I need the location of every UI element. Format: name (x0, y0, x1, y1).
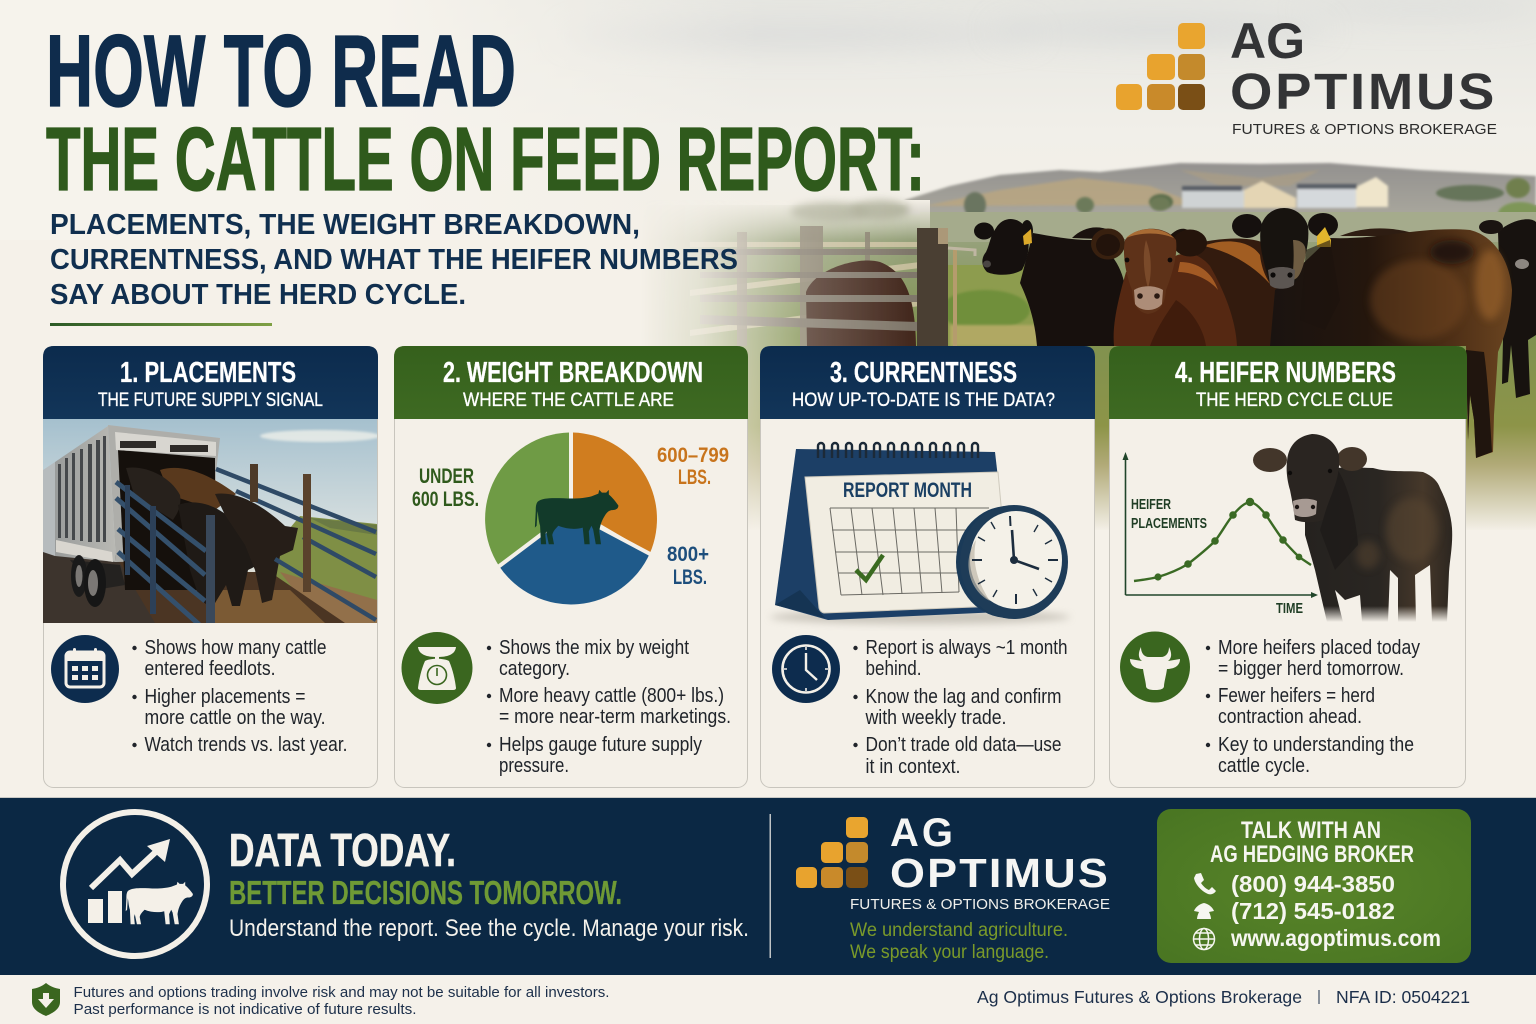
illustration: dark cow left (974, 219, 1124, 346)
icon: shield (32, 983, 60, 1016)
callout: contact box (1157, 809, 1471, 963)
illustration: rear cow body (1190, 238, 1288, 346)
text: currentness bullets: Know the lag and confirm (866, 686, 1062, 708)
text: placements bullets: Higher placements = (144, 686, 306, 708)
icon: calendar (51, 635, 119, 703)
icon: scale (402, 632, 472, 704)
text: risk disclaimer: Futures and options trading involve risk and may not be suitable for all investors. (74, 985, 610, 1001)
illustration: black heifer (1253, 434, 1452, 622)
chart labels: weight categories: 800+ (667, 543, 709, 566)
slogan: Understand the report. See the cycle. Manage your risk. (229, 915, 749, 942)
text: weight bullets: Shows the mix by weight (499, 637, 689, 659)
text: NFA identification (977, 987, 1470, 1007)
callout: contact box: www.agoptimus.com (1230, 925, 1441, 951)
panel: 3. currentness (760, 346, 1095, 788)
line chart: heifer placements over time: HEIFER (1131, 497, 1171, 513)
subtitle: CURRENTNESS, AND WHAT THE HEIFER NUMBERS (50, 244, 738, 276)
text: risk disclaimer: Past performance is not indicative of future results. (74, 1002, 416, 1018)
text: placements bullets (132, 637, 348, 756)
icon: phone (1194, 873, 1216, 894)
chart labels: weight categories: LBS. (678, 466, 711, 489)
text: placements bullets: more cattle on the way. (144, 707, 326, 729)
line chart: heifer placements over time: TIME (1276, 601, 1303, 617)
icon: growth chart with cow (63, 812, 207, 956)
heading: heifer numbers: 4. HEIFER NUMBERS (1175, 357, 1396, 389)
title: HOW TO READ (46, 14, 516, 128)
panel: 1. placements (43, 346, 380, 788)
text: currentness bullets: it in context. (866, 756, 960, 778)
text: heifer bullets: = bigger herd tomorrow. (1218, 658, 1404, 680)
logo: Ag Optimus footer: OPTIMUS (890, 850, 1110, 896)
footer banner (0, 797, 1536, 975)
subtitle: PLACEMENTS, THE WEIGHT BREAKDOWN, (50, 209, 640, 241)
text: weight bullets: More heavy cattle (800+ lbs.) (499, 685, 724, 707)
text: NFA identification: NFA ID: 0504221 (1336, 987, 1470, 1007)
disclaimer strip (0, 975, 1536, 1024)
logo: Ag Optimus footer: AG (890, 811, 953, 855)
heading: heifer numbers (1175, 357, 1396, 411)
chart labels: weight categories: 600 LBS. (412, 488, 479, 511)
callout: contact box: TALK WITH AN (1241, 817, 1381, 844)
illustration: background cattle backs (1072, 227, 1422, 250)
text: currentness bullets: Report is always ~1 month (866, 637, 1068, 659)
heading: heifer numbers: THE HERD CYCLE CLUE (1196, 389, 1393, 411)
icon: cow silhouette (535, 490, 618, 544)
text: weight bullets (487, 637, 731, 777)
subtitle: SAY ABOUT THE HERD CYCLE. (50, 279, 466, 311)
panel: 2. weight breakdown (394, 346, 748, 788)
heading: weight breakdown: WHERE THE CATTLE ARE (463, 389, 674, 411)
logo: Ag Optimus top: FUTURES & OPTIONS BROKERAGE (1232, 121, 1497, 138)
heading: weight breakdown: 2. WEIGHT BREAKDOWN (443, 357, 703, 389)
heading: currentness: 3. CURRENTNESS (830, 357, 1017, 389)
slogan (229, 824, 749, 942)
icon: globe (1194, 928, 1214, 950)
subtitle (50, 209, 738, 311)
logo: Ag Optimus footer: We speak your language. (850, 942, 1049, 963)
text: currentness bullets: behind. (866, 658, 922, 680)
heading: currentness: HOW UP-TO-DATE IS THE DATA? (792, 389, 1055, 411)
title: THE CATTLE ON FEED REPORT: (46, 110, 925, 210)
photo: cattle loading onto truck (43, 419, 380, 628)
line chart: heifer placements over time: PLACEMENTS (1131, 516, 1207, 532)
icon: landline phone (1194, 903, 1214, 919)
illustration: brown cow center (1091, 228, 1237, 346)
text: placements bullets: entered feedlots. (144, 658, 276, 680)
slogan: DATA TODAY. (229, 824, 456, 876)
panel: 4. heifer numbers (1109, 346, 1467, 788)
text: currentness bullets (853, 637, 1068, 778)
text: NFA identification: Ag Optimus Futures & Options Brokerage (977, 987, 1302, 1007)
chart labels: weight categories: LBS. (673, 566, 707, 589)
callout: contact box: (712) 545-0182 (1231, 898, 1395, 924)
heading: currentness (792, 357, 1055, 411)
logo: Ag Optimus top: AG (1230, 13, 1305, 69)
logo: Ag Optimus top: OPTIMUS (1230, 63, 1497, 120)
heading: placements: 1. PLACEMENTS (120, 357, 296, 389)
illustration: large cow right (1232, 208, 1512, 458)
text: weight bullets: Helps gauge future supply (499, 734, 702, 756)
text: heifer bullets: Fewer heifers = herd (1218, 685, 1375, 707)
logo: Ag Optimus footer (796, 811, 1110, 963)
icon: clock (772, 635, 840, 703)
chart labels: weight categories: 600–799 (657, 444, 729, 467)
icon: cow head (1120, 632, 1190, 702)
text: heifer bullets: Key to understanding the (1218, 734, 1414, 756)
callout: contact box: AG HEDGING BROKER (1210, 841, 1414, 868)
slogan: BETTER DECISIONS TOMORROW. (229, 874, 622, 911)
text: heifer bullets: contraction ahead. (1218, 706, 1362, 728)
text: heifer bullets: cattle cycle. (1218, 755, 1310, 777)
title (46, 14, 925, 210)
text: heifer bullets (1206, 637, 1420, 777)
text: heifer bullets: More heifers placed today (1218, 637, 1420, 659)
text: currentness bullets: Don’t trade old data—use (866, 734, 1062, 756)
text: currentness bullets: with weekly trade. (865, 707, 1006, 729)
callout: contact box: (800) 944-3850 (1231, 871, 1395, 897)
illustration: far right cow (1479, 219, 1536, 398)
text: weight bullets: = more near-term marketings. (499, 706, 731, 728)
text: placements bullets: Shows how many cattle (144, 637, 326, 659)
illustration: calendar and clock: REPORT MONTH (843, 479, 972, 502)
chart labels: weight categories: UNDER (419, 465, 474, 488)
illustration: calendar and clock (770, 443, 1070, 624)
logo: Ag Optimus footer: FUTURES & OPTIONS BROKERAGE (850, 897, 1110, 913)
text: weight bullets: pressure. (499, 755, 569, 777)
pie chart: weight categories (485, 432, 657, 604)
text: placements bullets: Watch trends vs. last year. (144, 734, 348, 756)
chart labels: weight categories (412, 444, 729, 589)
text: risk disclaimer (74, 985, 610, 1018)
heading: placements: THE FUTURE SUPPLY SIGNAL (98, 389, 323, 411)
logo: Ag Optimus footer: We understand agriculture. (850, 920, 1068, 941)
text: weight bullets: category. (499, 658, 570, 680)
heading: weight breakdown (443, 357, 703, 411)
heading: placements (98, 357, 323, 411)
line chart: heifer placements over time (1122, 452, 1318, 617)
logo: Ag Optimus top (1116, 13, 1497, 138)
